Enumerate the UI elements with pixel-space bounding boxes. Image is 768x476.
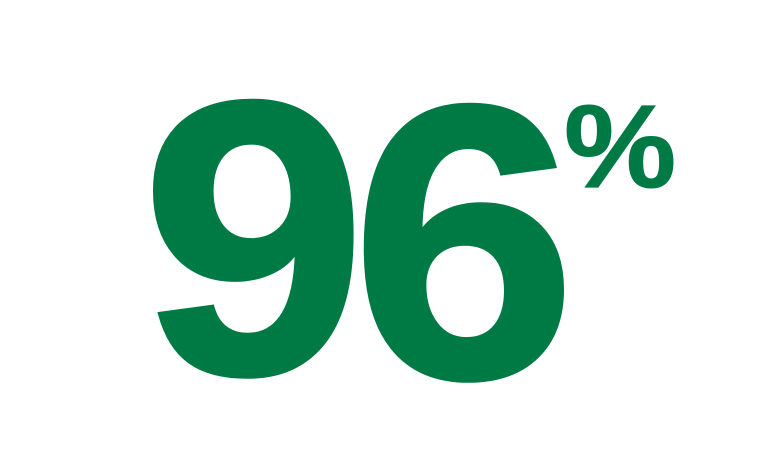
percent sign: %	[564, 80, 676, 212]
numeral 6: 6	[351, 25, 577, 460]
numeral 9: 9	[141, 21, 367, 456]
